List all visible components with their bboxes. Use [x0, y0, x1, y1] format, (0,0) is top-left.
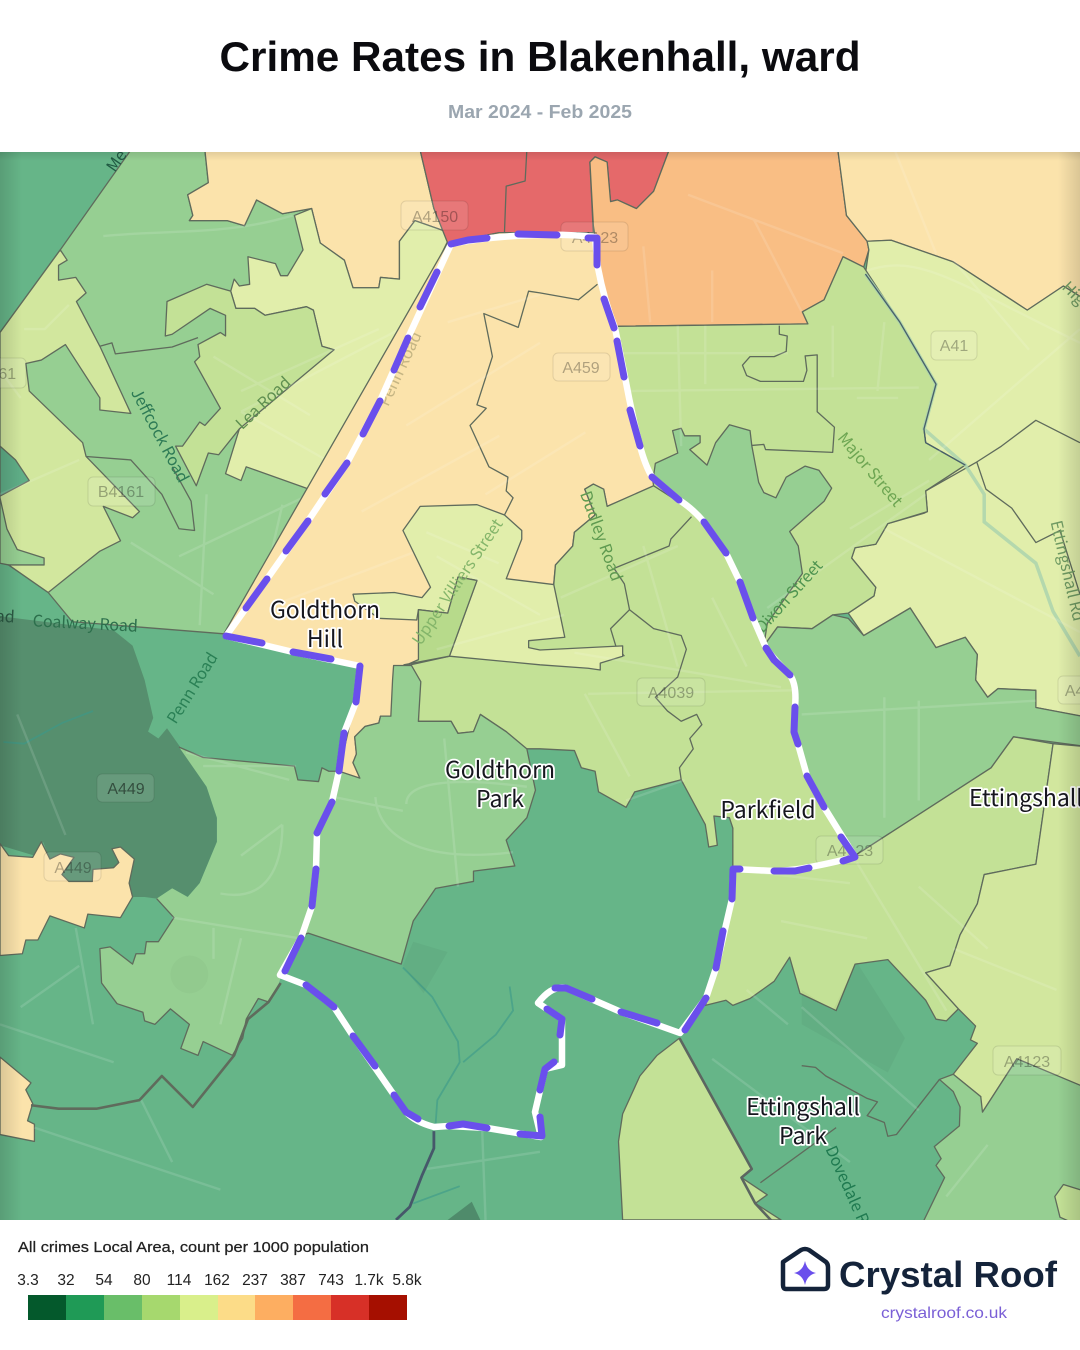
road shields: A4123	[827, 843, 873, 860]
legend values	[17, 1272, 422, 1289]
road shields: A4150	[412, 209, 458, 226]
south-west areas	[0, 616, 540, 1220]
north-west areas	[0, 150, 448, 634]
place labels: Goldthorn	[270, 591, 380, 625]
map base area	[0, 152, 1080, 1220]
icon: house with star	[783, 1249, 828, 1289]
road shields: A459	[562, 360, 600, 377]
south-east areas	[585, 608, 1080, 1231]
north-east areas	[590, 150, 1080, 718]
road shields	[0, 201, 1080, 1075]
road names: Dudley Road	[575, 487, 630, 584]
road names: Major Street	[833, 426, 910, 511]
place labels: Goldthorn	[445, 751, 555, 785]
road names: Upper Villiers Street	[405, 513, 508, 649]
legend values: 80	[133, 1272, 151, 1289]
legend values: 743	[318, 1272, 344, 1289]
legend colour bar	[28, 1295, 407, 1320]
road names: Me	[99, 144, 131, 176]
website url: crystalroof.co.uk	[881, 1305, 1008, 1322]
road names: Dixon Street	[748, 554, 827, 637]
road shields: A4123	[1004, 1054, 1050, 1071]
legend values: 3.3	[17, 1272, 39, 1289]
logo wordmark: Crystal Roof	[839, 1254, 1058, 1295]
place labels: Ettingshall	[746, 1088, 860, 1122]
subtitle: date range: Mar 2024 - Feb 2025	[448, 102, 632, 122]
road shields: A449	[107, 781, 145, 798]
road shields: B4161	[98, 484, 144, 501]
legend values: 237	[242, 1272, 268, 1289]
logo: Crystal Roof	[783, 1249, 1058, 1322]
road shields: A41	[940, 338, 968, 355]
place labels	[270, 591, 1080, 1151]
road names: Lea Road	[229, 370, 295, 434]
road shields: A449	[54, 860, 92, 877]
place labels: Park	[779, 1117, 827, 1151]
legend values: 32	[57, 1272, 75, 1289]
place labels: Ettingshall	[969, 779, 1080, 813]
road shields: A4123	[572, 230, 618, 247]
map edge vignette	[0, 152, 1080, 1220]
road names: Penn Road	[371, 327, 426, 409]
place labels: Park	[476, 780, 524, 814]
legend values: 387	[280, 1272, 306, 1289]
legend values: 114	[167, 1272, 192, 1289]
ward boundary: purple dashes	[226, 234, 855, 1136]
legend	[17, 1239, 422, 1320]
place labels: Parkfield	[720, 791, 816, 825]
legend values: 162	[204, 1272, 230, 1289]
legend title: All crimes Local Area, count per 1000 population	[18, 1239, 369, 1256]
legend values: 1.7k	[354, 1272, 384, 1289]
road names: Jeffcock Road	[126, 383, 196, 486]
road names: Dovedale Road	[821, 1141, 888, 1253]
red high-crime areas	[224, 150, 669, 782]
legend values: 5.8k	[392, 1272, 422, 1289]
light pocket inside ward	[353, 505, 623, 670]
road shields: A4039	[648, 685, 694, 702]
ward boundary: white outline	[226, 235, 855, 1137]
place labels: Hill	[307, 620, 343, 654]
ward tan area	[224, 233, 655, 782]
legend values: 54	[95, 1272, 113, 1289]
road names: Penn Road	[160, 647, 222, 728]
title: Crime Rates in Blakenhall, ward	[220, 33, 860, 80]
road names: Coalway Road	[32, 607, 138, 637]
central lime area	[353, 484, 855, 870]
